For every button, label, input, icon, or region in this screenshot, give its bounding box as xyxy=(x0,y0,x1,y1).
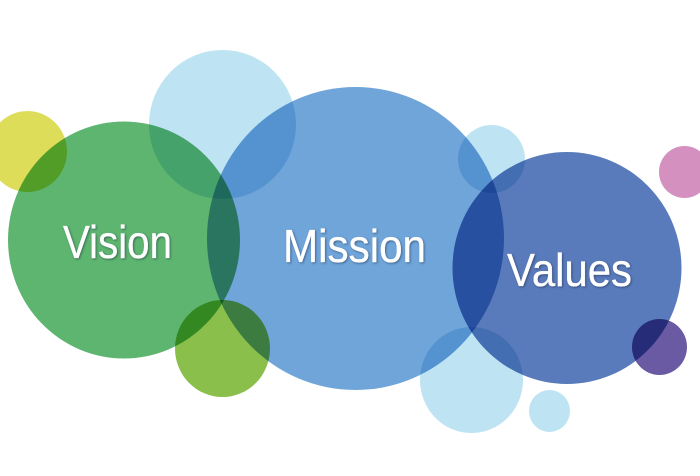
circle: purple accent xyxy=(632,319,687,375)
circle: yellow accent xyxy=(0,111,67,192)
circle: Vision green xyxy=(8,122,240,358)
circle: light blue bottom xyxy=(420,327,523,433)
circle: small light blue top right xyxy=(458,125,525,193)
circle: olive green accent xyxy=(175,300,270,397)
circle: Values indigo xyxy=(452,152,682,384)
circle: light blue top xyxy=(149,50,296,199)
label: Values: Values xyxy=(507,244,632,296)
label: Vision: Vision xyxy=(63,216,172,268)
label: Mission: Mission xyxy=(283,220,426,272)
circle: pink accent xyxy=(659,146,700,198)
circle: Mission blue xyxy=(207,87,504,390)
circle: small light blue bottom xyxy=(529,390,570,432)
